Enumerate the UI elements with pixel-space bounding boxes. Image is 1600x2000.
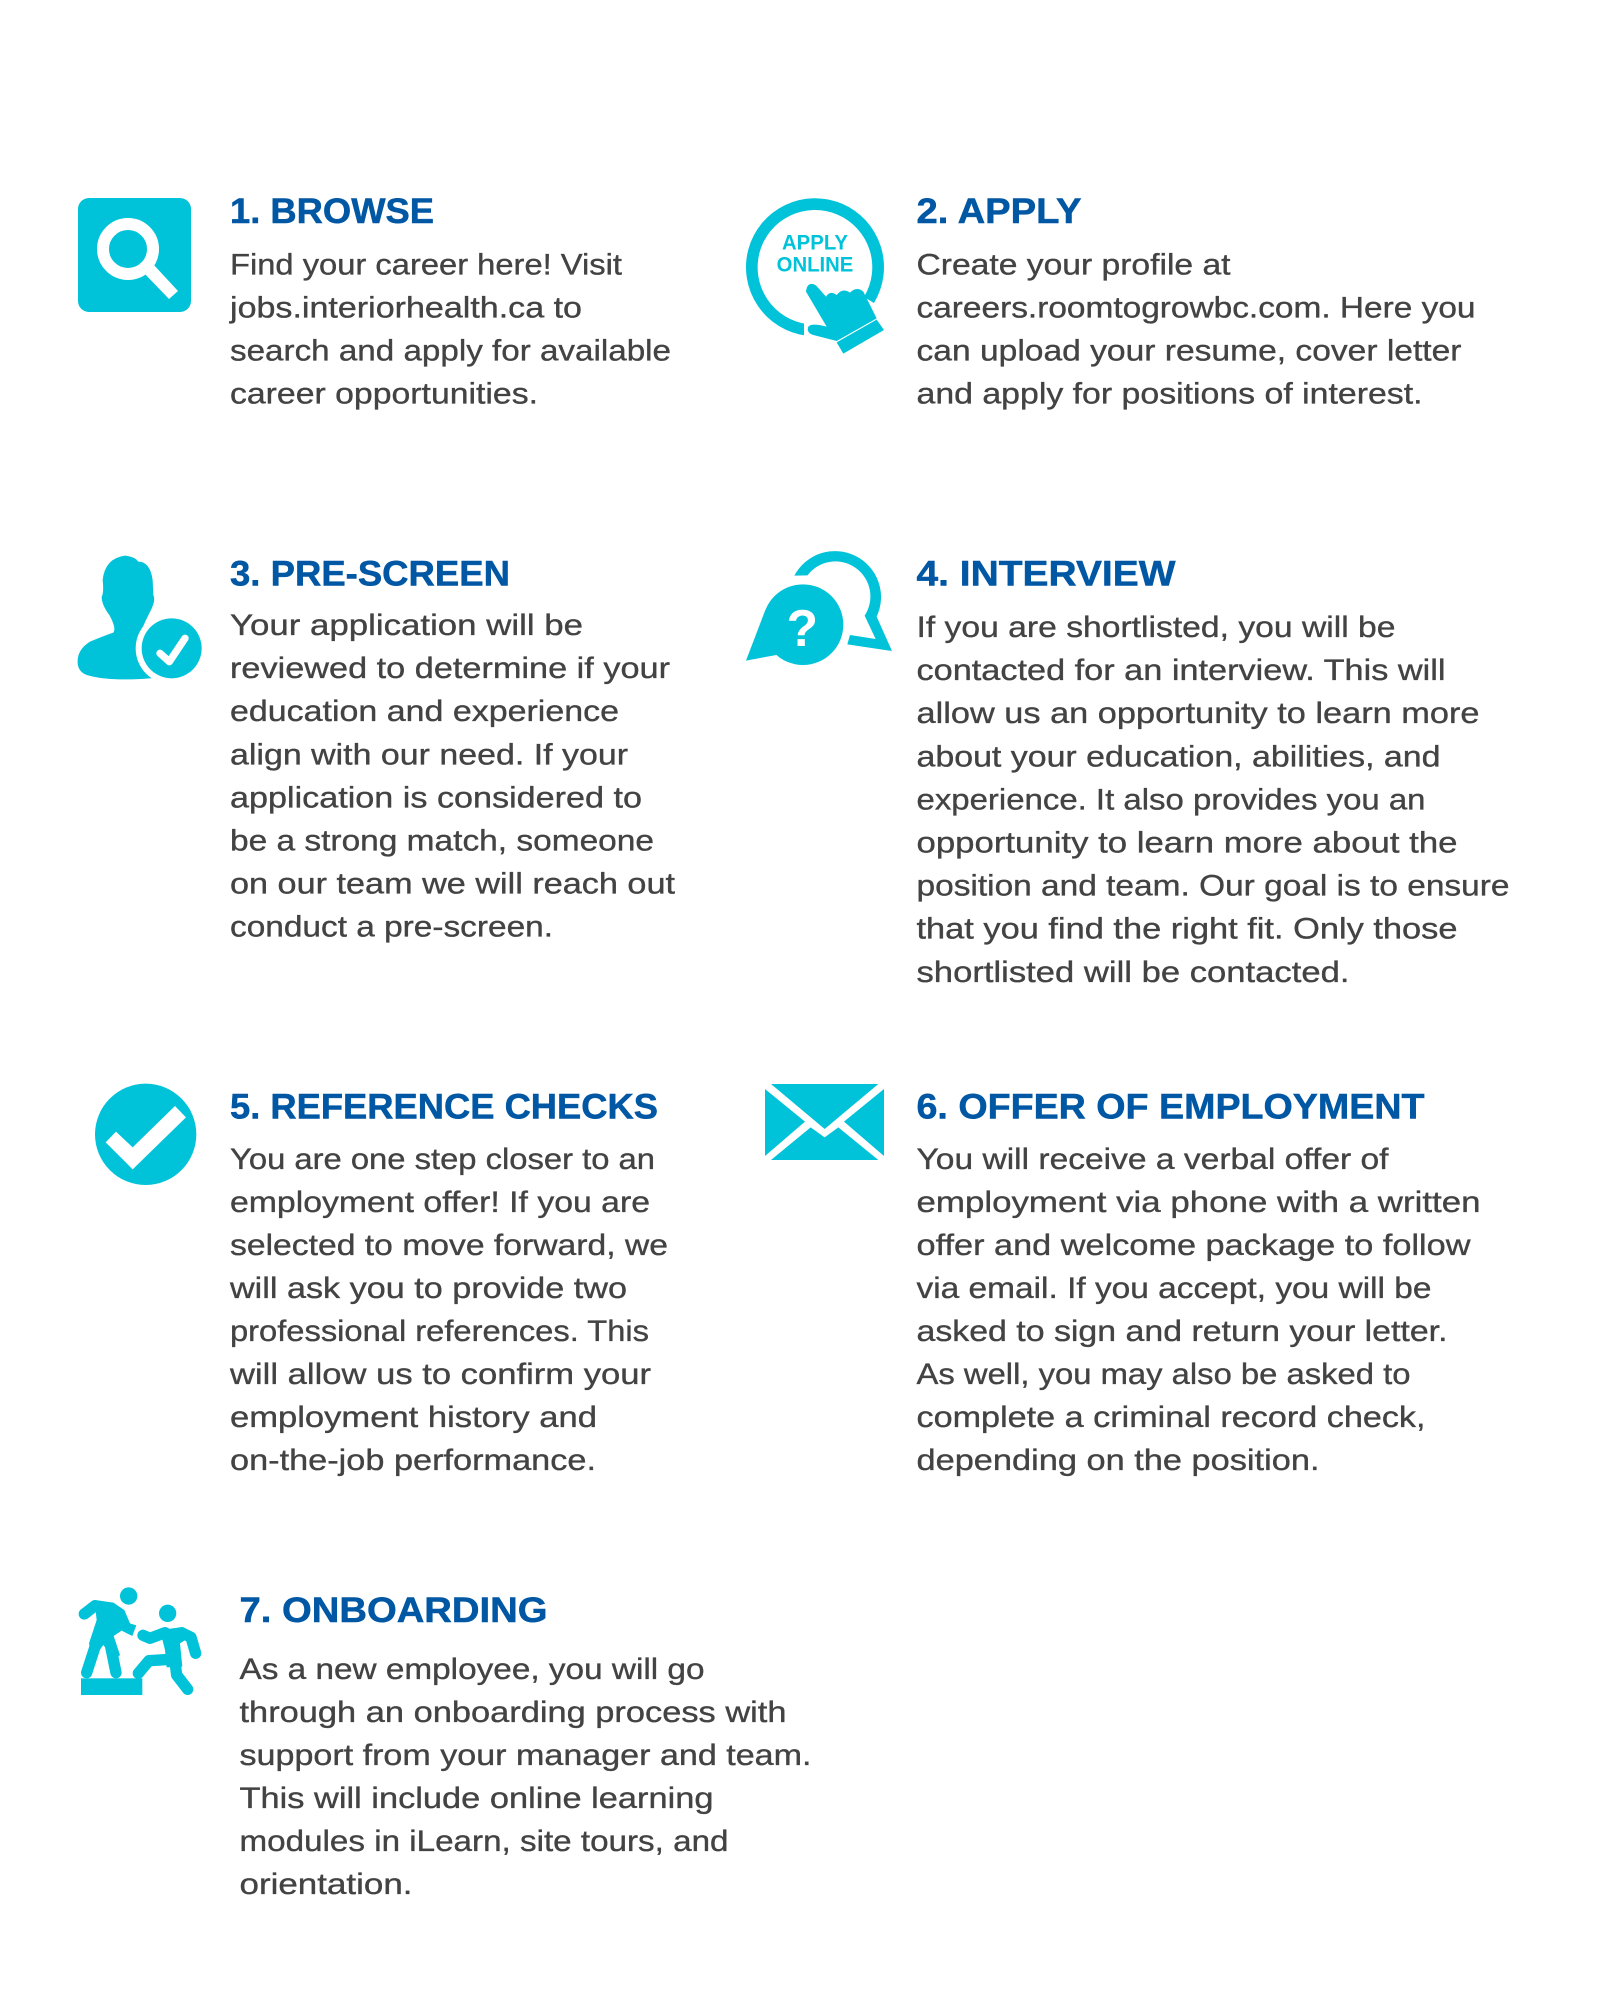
body text: on our team we will reach out — [230, 868, 676, 901]
body text: align with our need. If your — [230, 738, 628, 771]
body text: careers.roomtogrowbc.com. Here you — [916, 291, 1476, 324]
body text: Your application will be — [230, 609, 583, 642]
body text: contacted for an interview. This will — [916, 654, 1446, 687]
body text: position and team. Our goal is to ensure — [916, 870, 1510, 903]
body text: complete a criminal record check, — [916, 1401, 1426, 1434]
body text: on-the-job performance. — [230, 1444, 596, 1477]
body text — [230, 609, 676, 944]
body text: that you find the right fit. Only those — [916, 913, 1458, 946]
body text: via email. If you accept, you will be — [916, 1272, 1432, 1305]
panel: step 1 browse — [78, 192, 671, 411]
panel: step 6 offer of employment — [765, 1084, 1480, 1477]
icon: envelope — [765, 1084, 884, 1160]
body text: selected to move forward, we — [230, 1229, 668, 1262]
body text: jobs.interiorhealth.ca to — [229, 291, 582, 324]
body text: support from your manager and team. — [240, 1739, 812, 1772]
body text: asked to sign and return your letter. — [916, 1315, 1448, 1348]
body text: will ask you to provide two — [229, 1272, 627, 1305]
heading: 6. OFFER OF EMPLOYMENT — [916, 1088, 1424, 1126]
icon: question speech bubbles: ? — [787, 599, 818, 657]
icon: magnifier — [78, 198, 191, 312]
body text: As a new employee, you will go — [240, 1653, 704, 1686]
icon: apply online button: ONLINE — [777, 254, 853, 277]
body text: You are one step closer to an — [230, 1143, 655, 1176]
panel: step 3 pre-screen — [78, 554, 676, 944]
body text — [229, 1143, 668, 1477]
body text: As well, you may also be asked to — [916, 1358, 1410, 1391]
body text: career opportunities. — [230, 378, 538, 411]
body text: be a strong match, someone — [230, 824, 654, 858]
body text: This will include online learning — [240, 1782, 714, 1815]
body text: employment history and — [230, 1401, 597, 1434]
body text: modules in iLearn, site tours, and — [240, 1825, 728, 1858]
body text: application is considered to — [230, 781, 642, 814]
body text: allow us an opportunity to learn more — [916, 697, 1480, 730]
body text — [916, 1143, 1480, 1477]
heading: 4. INTERVIEW — [916, 554, 1176, 594]
heading: 2. APPLY — [916, 192, 1082, 231]
body text: experience. It also provides you an — [916, 783, 1426, 816]
body text: Create your profile at — [916, 248, 1231, 281]
icon: question speech bubbles — [746, 551, 892, 665]
panel: step 7 onboarding — [81, 1587, 811, 1901]
body text: will allow us to confirm your — [229, 1358, 651, 1391]
icon: apply online button — [746, 198, 884, 354]
body text: You will receive a verbal offer of — [916, 1143, 1389, 1176]
body text: conduct a pre-screen. — [230, 911, 553, 944]
body text: can upload your resume, cover letter — [916, 334, 1462, 368]
body text: reviewed to determine if your — [230, 652, 670, 685]
body text: employment offer! If you are — [230, 1186, 650, 1219]
body text: orientation. — [240, 1868, 412, 1901]
heading: 1. BROWSE — [230, 192, 434, 231]
heading: 3. PRE-SCREEN — [230, 554, 510, 594]
body text: shortlisted will be contacted. — [916, 956, 1350, 989]
panel: step 2 apply — [746, 192, 1476, 411]
body text: and apply for positions of interest. — [916, 378, 1422, 411]
body text: education and experience — [230, 695, 619, 728]
body text: offer and welcome package to follow — [916, 1229, 1471, 1262]
body text: about your education, abilities, and — [916, 740, 1440, 773]
icon: check circle — [95, 1084, 196, 1185]
body text — [916, 248, 1476, 411]
panel: step 5 reference checks — [95, 1084, 668, 1477]
body text: If you are shortlisted, you will be — [916, 611, 1396, 644]
body text: depending on the position. — [916, 1444, 1320, 1477]
body text: Find your career here! Visit — [230, 248, 623, 281]
body text — [916, 611, 1510, 989]
body text: search and apply for available — [230, 334, 671, 368]
body text: employment via phone with a written — [916, 1186, 1480, 1219]
icon: apply online button: APPLY — [782, 231, 848, 254]
body text — [229, 248, 671, 411]
body text: opportunity to learn more about the — [916, 826, 1458, 860]
heading: 5. REFERENCE CHECKS — [230, 1088, 658, 1126]
body text — [240, 1653, 812, 1901]
icon: person with check — [78, 556, 208, 684]
panel: step 4 interview — [746, 551, 1510, 989]
icon: person helping another up a step — [81, 1587, 196, 1695]
heading: 7. ONBOARDING — [240, 1591, 548, 1630]
body text: through an onboarding process with — [240, 1696, 786, 1729]
body text: professional references. This — [230, 1315, 649, 1348]
